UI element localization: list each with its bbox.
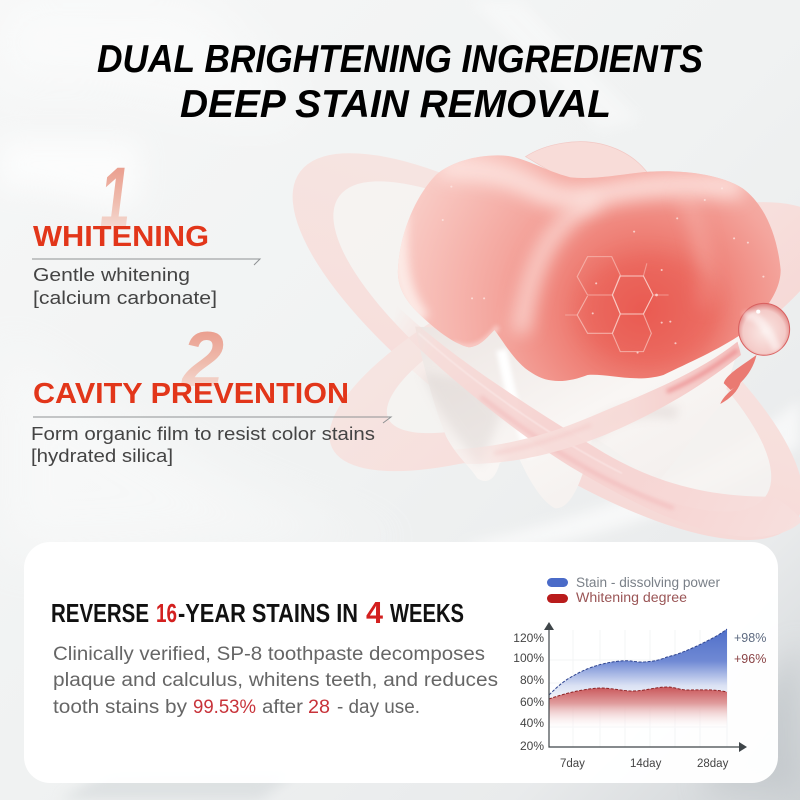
card body text: - day use. xyxy=(337,697,420,718)
title: DUAL BRIGHTENING INGREDIENTS xyxy=(97,38,703,81)
end values: +98% xyxy=(734,631,766,645)
chart legend: Whitening degree xyxy=(576,590,687,605)
y labels: 60% xyxy=(520,695,544,709)
crown xyxy=(398,155,781,381)
y labels: 120% xyxy=(513,631,544,645)
sparkles xyxy=(442,186,764,354)
x labels: 14day xyxy=(630,758,662,770)
heading whitening: WHITENING xyxy=(33,221,209,253)
y labels: 40% xyxy=(520,716,544,730)
y labels: 100% xyxy=(513,651,544,665)
card body text: after xyxy=(262,697,304,718)
ring one back xyxy=(238,89,800,604)
title xyxy=(97,38,703,126)
card body text: 28 xyxy=(308,697,330,718)
tooth root xyxy=(415,327,743,508)
red fragments xyxy=(720,355,757,404)
card body text: Clinically verified, SP-8 toothpaste decomposes xyxy=(53,644,485,665)
card heading: WEEKS xyxy=(390,598,464,628)
description: [hydrated silica] xyxy=(31,446,173,466)
numeral 2: 2 xyxy=(180,315,224,403)
description xyxy=(31,424,375,466)
card heading: REVERSE xyxy=(51,598,149,628)
chart legend xyxy=(547,575,720,605)
x labels: 28day xyxy=(697,758,729,770)
card heading: 4 xyxy=(366,595,384,630)
end values xyxy=(734,631,766,666)
tooth illustration with rings xyxy=(292,141,800,540)
heading cavity prevention: CAVITY PREVENTION xyxy=(33,378,349,410)
numeral 1: 1 xyxy=(100,150,130,244)
blue area xyxy=(549,629,727,700)
card body text xyxy=(53,644,498,718)
card body text: plaque and calculus, whitens teeth, and reduces xyxy=(53,670,498,691)
description: Form organic film to resist color stains xyxy=(31,424,375,444)
benefit one: whitening xyxy=(32,150,260,308)
x labels xyxy=(560,758,729,770)
ring one front band xyxy=(394,305,800,537)
description: [calcium carbonate] xyxy=(33,288,217,308)
x labels: 7day xyxy=(560,758,585,770)
card heading: 16 xyxy=(156,598,177,628)
divider rule xyxy=(33,417,391,423)
description: Gentle whitening xyxy=(33,265,190,285)
y labels: 80% xyxy=(520,673,544,687)
ring two front band xyxy=(444,342,741,464)
end values: +96% xyxy=(734,652,766,666)
back cusp xyxy=(525,142,648,183)
y labels: 20% xyxy=(520,739,544,753)
chart legend: Stain - dissolving power xyxy=(576,575,720,590)
hexagon molecule xyxy=(565,257,669,352)
dashed tops xyxy=(549,629,727,695)
card heading: -YEAR STAINS IN xyxy=(178,598,358,628)
title: DEEP STAIN REMOVAL xyxy=(180,83,611,126)
line chart xyxy=(513,622,766,770)
red area xyxy=(549,687,727,728)
axes xyxy=(549,630,740,747)
description xyxy=(33,265,217,308)
droplet sphere xyxy=(739,303,790,355)
divider rule xyxy=(32,259,260,265)
ring two back xyxy=(296,150,800,523)
card body text: 99.53% xyxy=(193,697,256,718)
panel: clinical results card xyxy=(24,542,778,783)
card heading xyxy=(51,595,464,630)
card body text: tooth stains by xyxy=(53,697,188,718)
benefit two: cavity prevention xyxy=(31,315,391,466)
y labels xyxy=(513,631,544,753)
grid xyxy=(549,630,727,747)
